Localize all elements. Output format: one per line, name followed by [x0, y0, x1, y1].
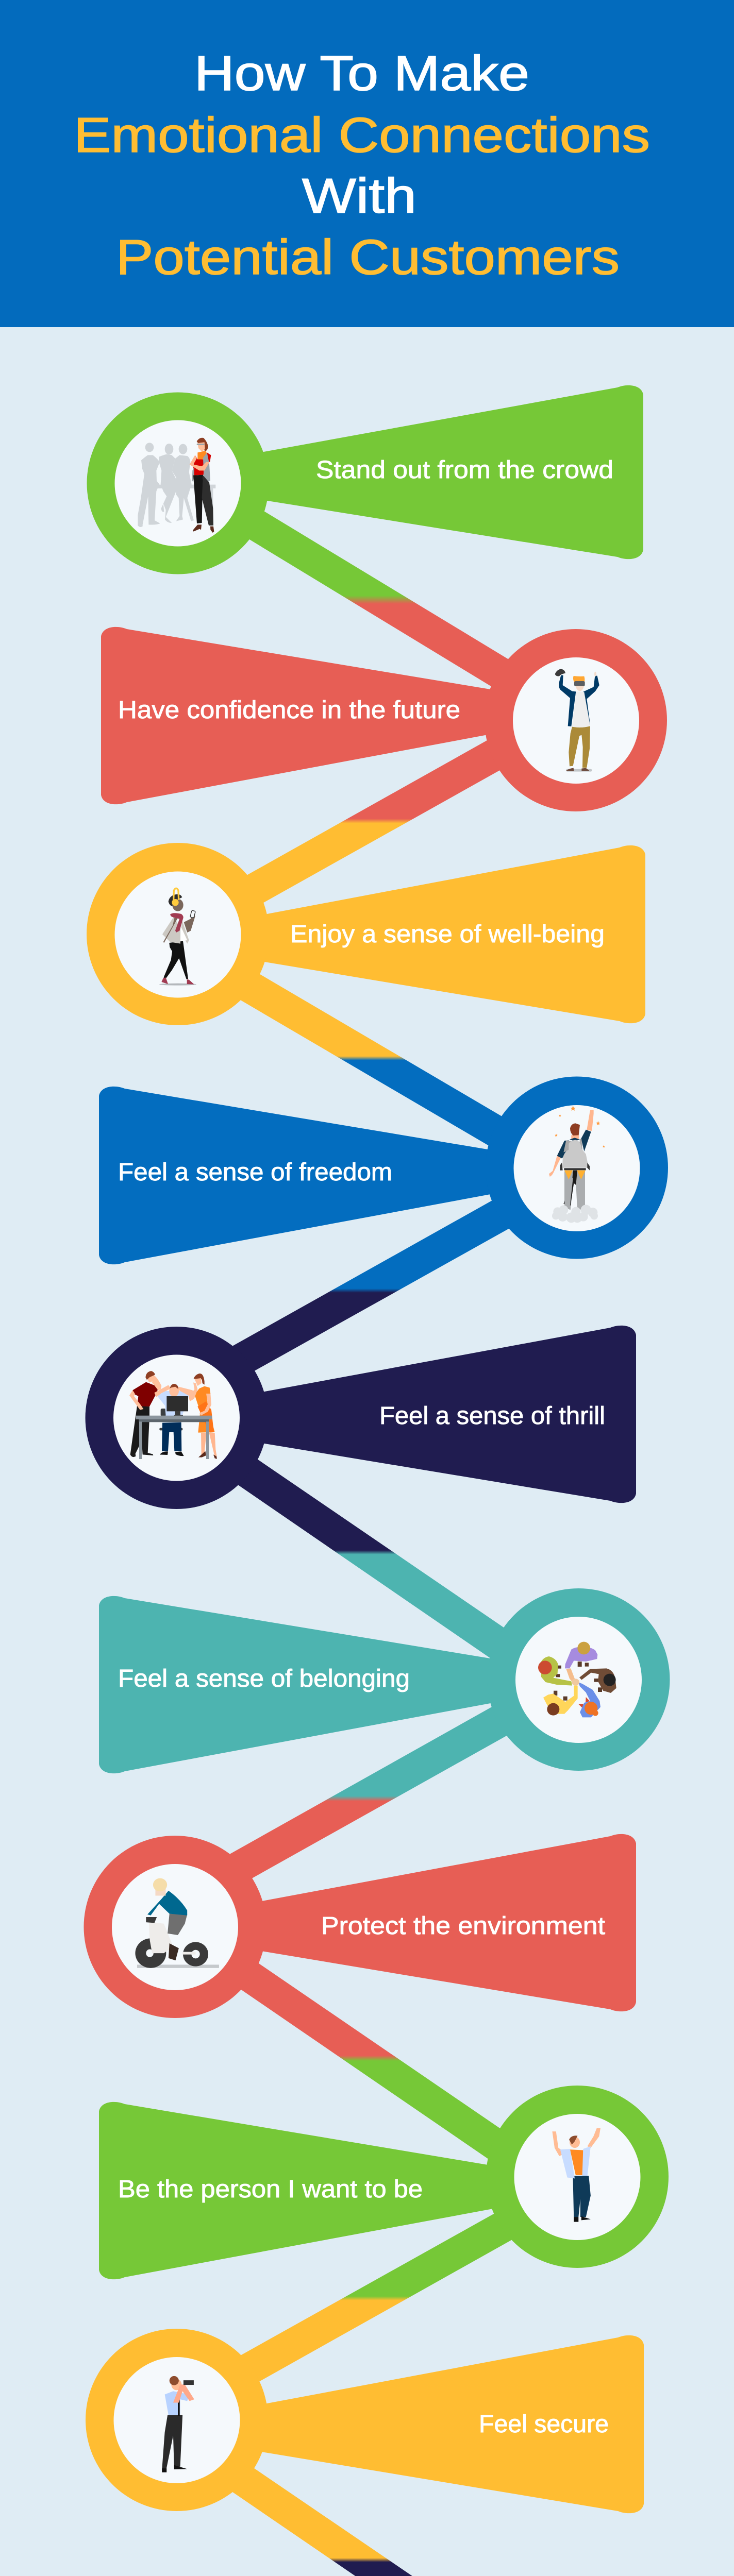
- label: Protect the environment: [321, 1912, 605, 1940]
- header band: [0, 0, 734, 327]
- icon: man with binoculars: [162, 2376, 194, 2472]
- connector 5 to 6: [221, 1448, 521, 1670]
- title: [74, 46, 650, 285]
- icon: five people joining hands: [538, 1642, 616, 1717]
- label: Feel a sense of freedom: [118, 1159, 392, 1186]
- label: Be the person I want to be: [118, 2176, 423, 2203]
- icon: man with raised arms: [552, 2128, 600, 2222]
- connector 3 to 4: [221, 962, 523, 1157]
- panel: be the person I want to be: [99, 2086, 669, 2279]
- icon: man on exercise bike: [135, 1878, 219, 1968]
- connector 6 to 7: [210, 1697, 527, 1890]
- icon: three colleagues around a desk: [129, 1371, 217, 1459]
- label: Stand out from the crowd: [316, 456, 613, 484]
- icon: man with VR headset and controller: [555, 669, 599, 772]
- panel: feel a sense of freedom: [99, 1077, 668, 1264]
- icon: woman in front of a crowd: [138, 438, 215, 533]
- title: With: [302, 168, 416, 224]
- panel: have confidence in the future: [101, 627, 667, 811]
- connector 8 to 9: [221, 2202, 532, 2393]
- icon: woman walking with headphones: [159, 888, 196, 986]
- title: How To Make: [194, 46, 529, 101]
- label: Feel a sense of belonging: [118, 1665, 410, 1692]
- icon: man with jetpack: [549, 1106, 605, 1223]
- label: Feel secure: [479, 2411, 609, 2438]
- panel: protect the environment: [84, 1834, 636, 2018]
- label: Have confidence in the future: [118, 697, 460, 724]
- panel: feel a sense of belonging: [99, 1588, 670, 1773]
- panel: feel secure: [86, 2329, 644, 2513]
- connector 9 to 10: [214, 2456, 521, 2576]
- connector 1 to 2: [230, 499, 528, 699]
- title: Potential Customers: [116, 230, 620, 285]
- connector 4 to 5: [212, 1189, 529, 1382]
- connector 7 to 8: [223, 1951, 518, 2171]
- panel: enjoy a sense of well-being: [87, 843, 645, 1025]
- title: Emotional Connections: [74, 108, 650, 163]
- panel: feel a sense of thrill: [86, 1326, 636, 1509]
- label: Enjoy a sense of well-being: [290, 921, 605, 948]
- label: Feel a sense of thrill: [379, 1402, 605, 1430]
- connector 2 to 3: [227, 728, 520, 914]
- panel: stand out from the crowd: [87, 385, 643, 574]
